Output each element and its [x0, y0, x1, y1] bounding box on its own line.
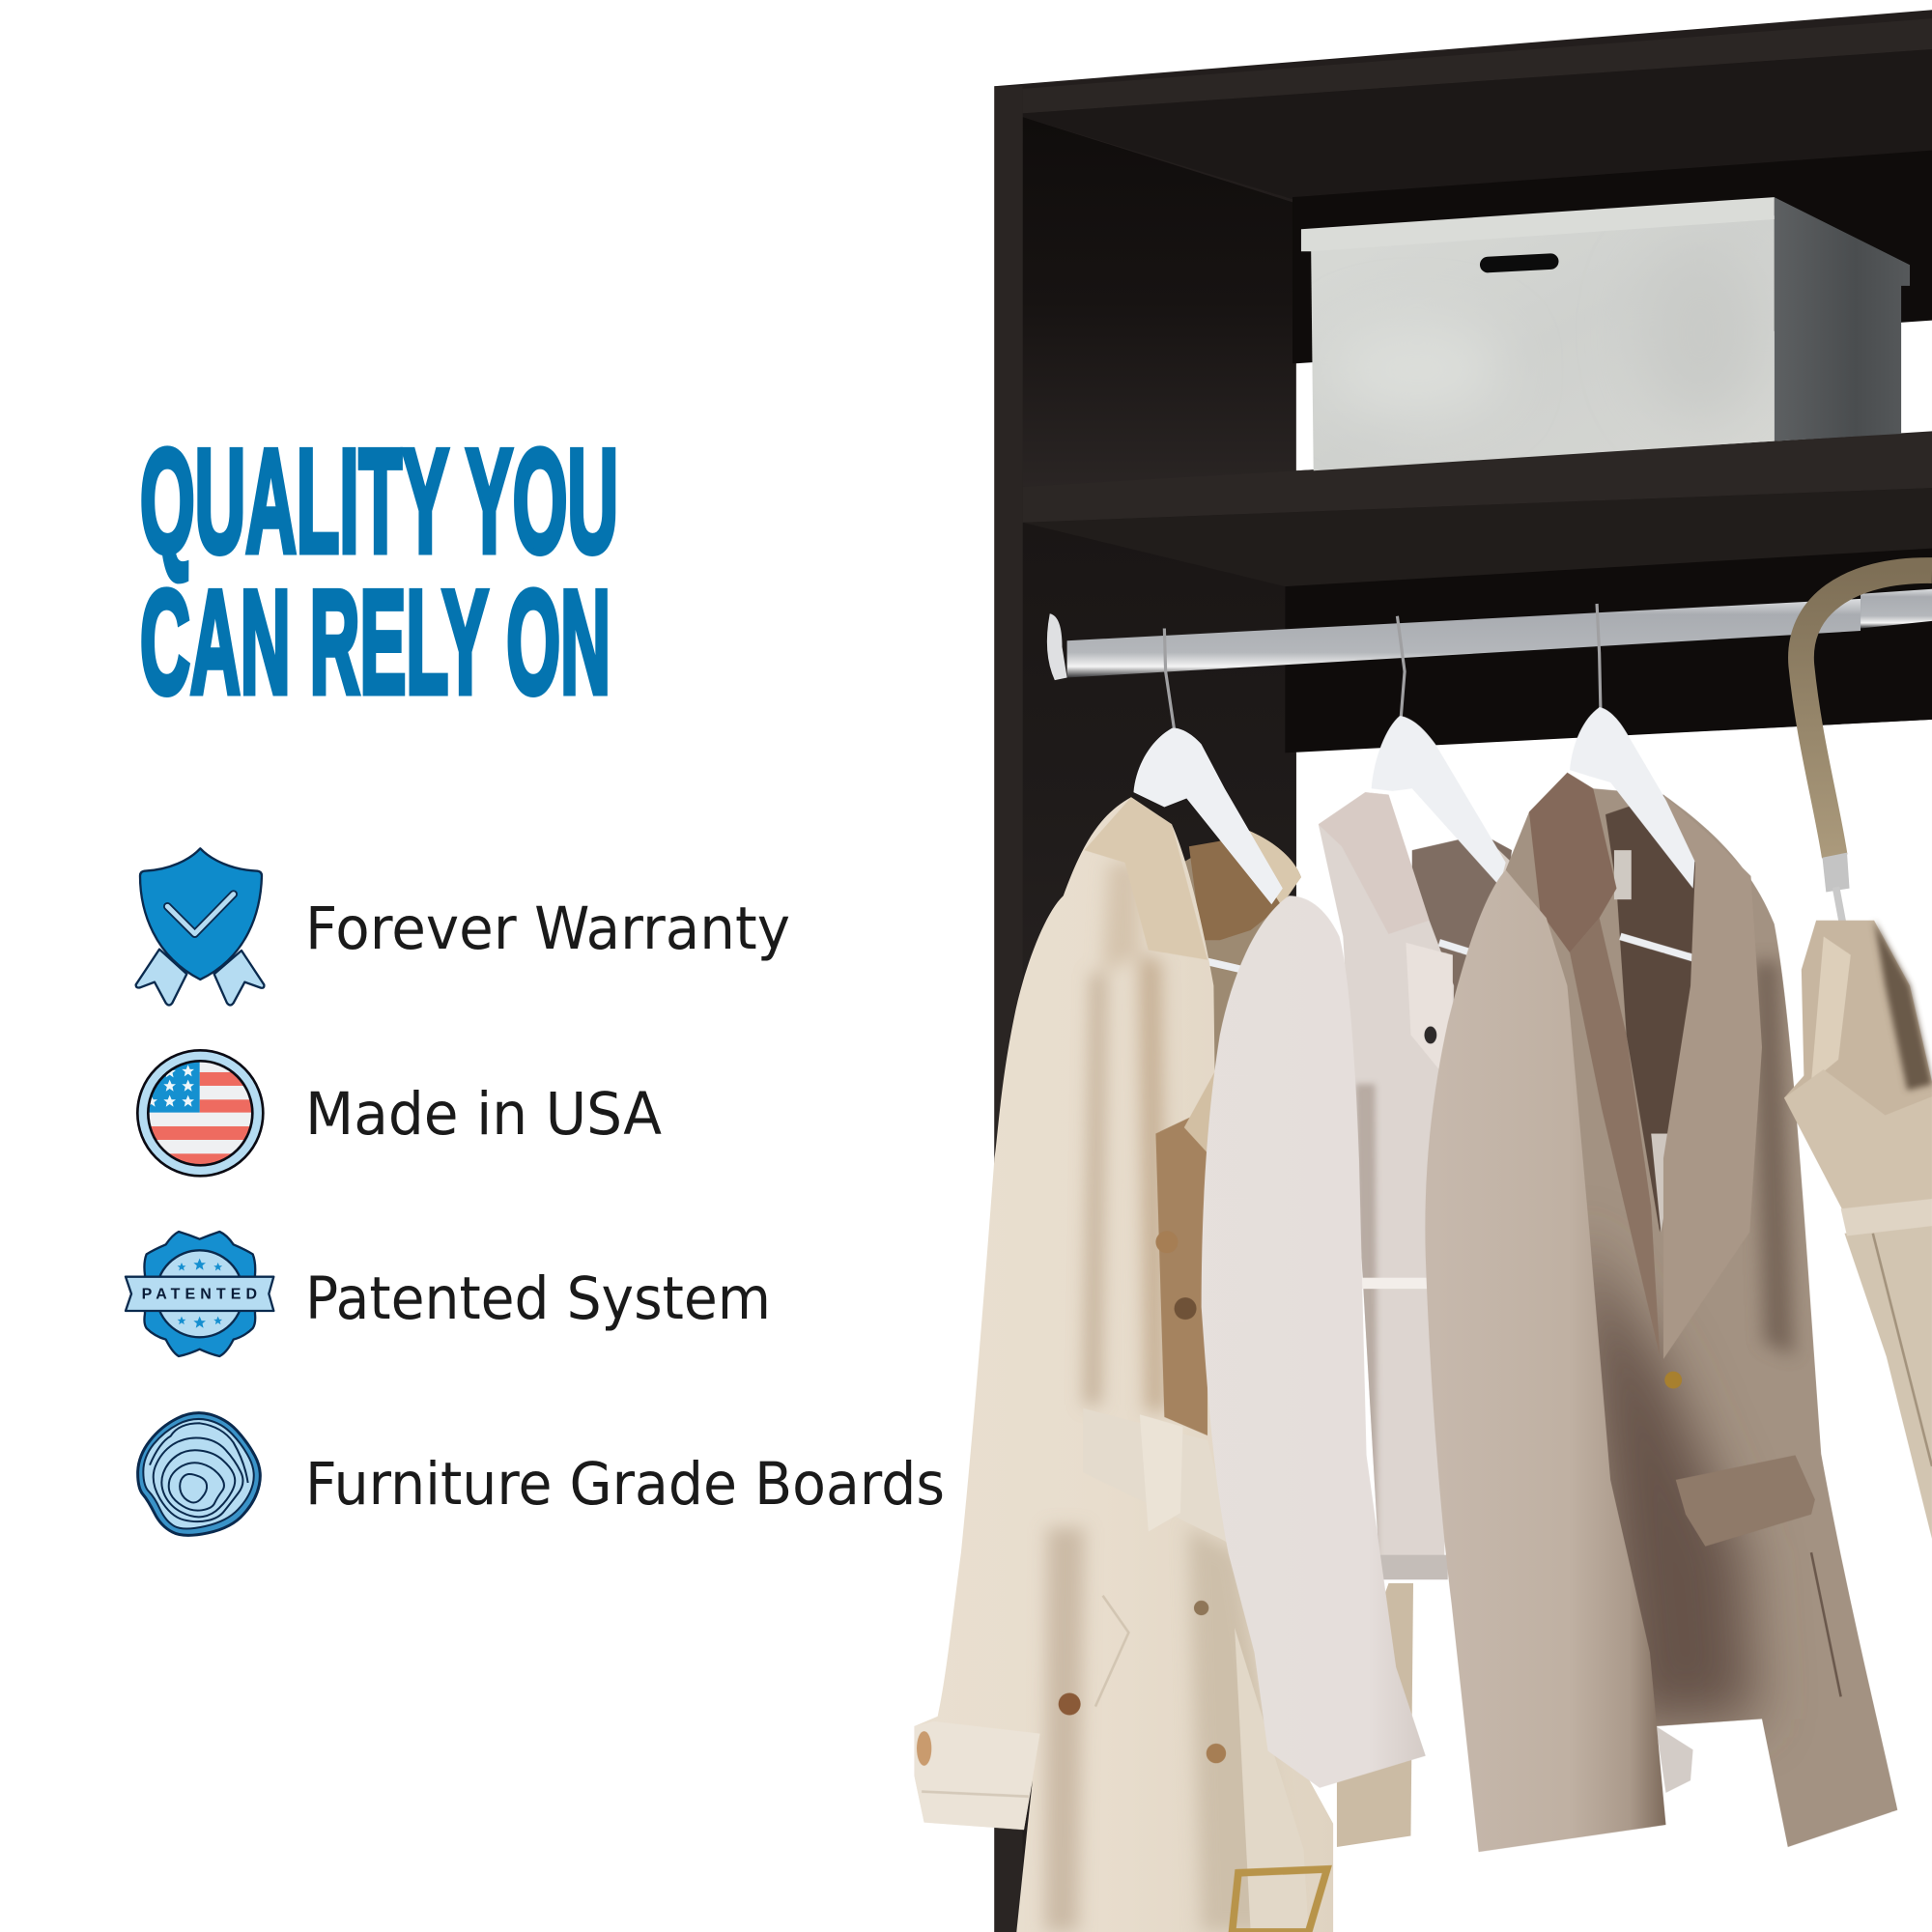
label: made in usa: Made in USA [305, 1080, 662, 1149]
chrome rod [1047, 589, 1932, 680]
cream jacket sleeve [1202, 895, 1426, 1788]
brown blazer body [1506, 773, 1897, 1847]
icon: american flag badge [137, 1050, 263, 1176]
infographic canvas: QUALITY YOU [140, 419, 618, 583]
label: furniture grade boards: Furniture Grade Boards [305, 1450, 945, 1519]
trench coat [914, 797, 1333, 1932]
jacket collar and placket [1319, 792, 1453, 1076]
coat cuff [914, 1721, 1040, 1830]
hanger hooks [1164, 604, 1601, 729]
coat buttons [917, 1231, 1226, 1766]
brown blazer sleeve [1425, 870, 1665, 1852]
blazer lapels [1529, 773, 1815, 1793]
feature: forever warranty [136, 848, 790, 1005]
label: patented system: Patented System [305, 1264, 771, 1333]
feature: patented system [126, 1232, 771, 1356]
feature list [126, 848, 945, 1535]
belt tail [1235, 1628, 1309, 1932]
photo: closet with hanging clothes [914, 10, 1932, 1932]
coat belt [1083, 1408, 1235, 1547]
closet frame [994, 10, 1932, 1932]
icon: patented seal: PATENTED [142, 1286, 257, 1302]
infographic canvas: CAN RELY ON [140, 560, 611, 724]
gold buckle [1233, 1869, 1327, 1932]
icon: patented seal [126, 1232, 273, 1356]
hanger 3 [1570, 707, 1695, 889]
feature: made in usa [137, 1050, 662, 1176]
cream jacket body [1319, 792, 1454, 1579]
feature: furniture grade boards [138, 1413, 945, 1535]
icon: shield with check and ribbons [136, 848, 264, 1005]
coat pocket outline [1095, 1596, 1128, 1707]
jacket back [1412, 835, 1512, 1133]
umbrella [1784, 921, 1932, 1539]
title [140, 419, 618, 724]
back tail of coat [1337, 1583, 1413, 1847]
storage box [1301, 197, 1910, 470]
trench coat lining [1182, 828, 1301, 1233]
hanger 2 [1372, 716, 1506, 886]
icon: wood growth rings [138, 1413, 260, 1535]
hanger 1 [1133, 728, 1283, 904]
umbrella handle [1801, 571, 1932, 926]
label: forever warranty: Forever Warranty [305, 895, 790, 963]
